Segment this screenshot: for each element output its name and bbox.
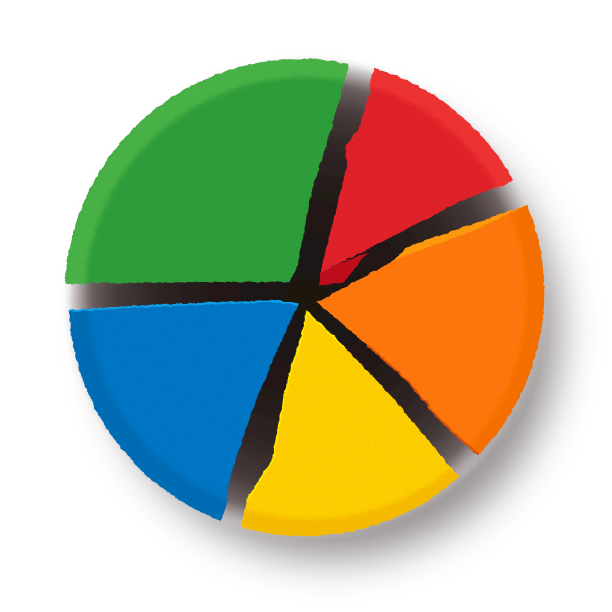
blue top edge highlight — [69, 301, 298, 311]
slice: blue — [68, 300, 299, 521]
blue rim — [69, 310, 230, 521]
slice: yellow — [240, 310, 459, 536]
infographic: cracked pie chart — [64, 58, 586, 586]
slice: green — [64, 58, 348, 284]
orange rim — [468, 205, 545, 454]
orange lower torn edge — [367, 345, 478, 455]
green rim — [64, 58, 348, 284]
red underside flap — [319, 252, 368, 286]
yellow rim — [240, 468, 459, 536]
yellow torn edge highlight — [247, 312, 347, 500]
slice: red — [319, 68, 513, 286]
red rim — [368, 68, 513, 190]
dark gaps between slices — [64, 56, 548, 540]
surface grain texture — [66, 59, 544, 536]
soft drop shadow — [106, 106, 558, 558]
orange top highlight — [390, 205, 527, 263]
slice: orange — [316, 205, 545, 456]
